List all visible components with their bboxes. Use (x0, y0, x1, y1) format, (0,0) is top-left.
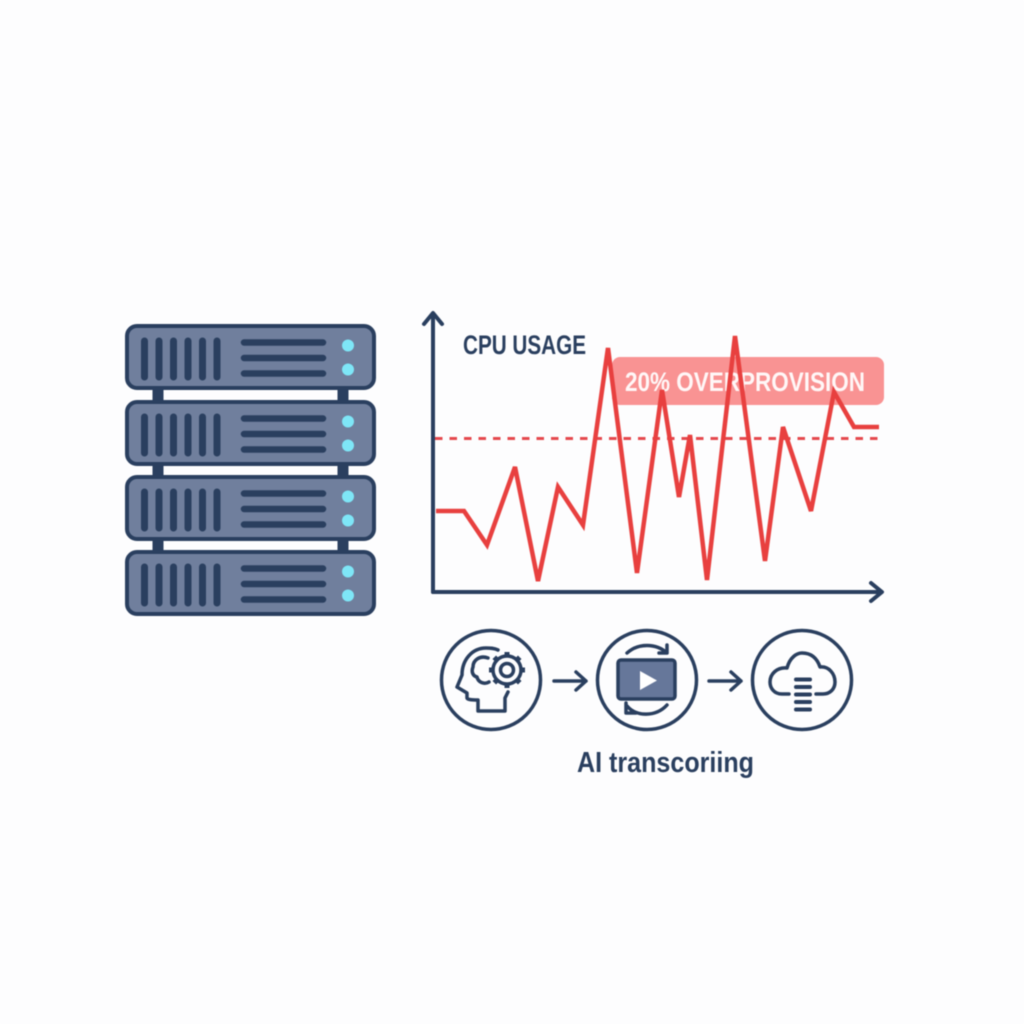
server unit 3 (127, 477, 374, 539)
flow caption: AI transcoriing (577, 747, 754, 779)
icon: video transcoding (598, 630, 696, 730)
server unit 4 (127, 552, 374, 614)
icon: AI head with gear (442, 630, 540, 730)
overprovision badge: 20% OVERPROVISION (625, 367, 865, 397)
axis title: CPU USAGE (463, 330, 586, 360)
threshold dashed line (435, 437, 879, 440)
icon: cloud storage (752, 630, 852, 730)
CPU usage chart (424, 313, 884, 601)
overprovision badge (612, 357, 884, 405)
arrow 1 (554, 672, 586, 690)
arrow 2 (709, 672, 741, 690)
chart axes (424, 313, 882, 601)
rack connectors (158, 385, 343, 560)
AI transcoding flow (442, 630, 852, 779)
server unit 1 (127, 326, 374, 388)
server rack (127, 326, 374, 614)
server unit 2 (127, 402, 374, 464)
usage line (436, 336, 879, 581)
